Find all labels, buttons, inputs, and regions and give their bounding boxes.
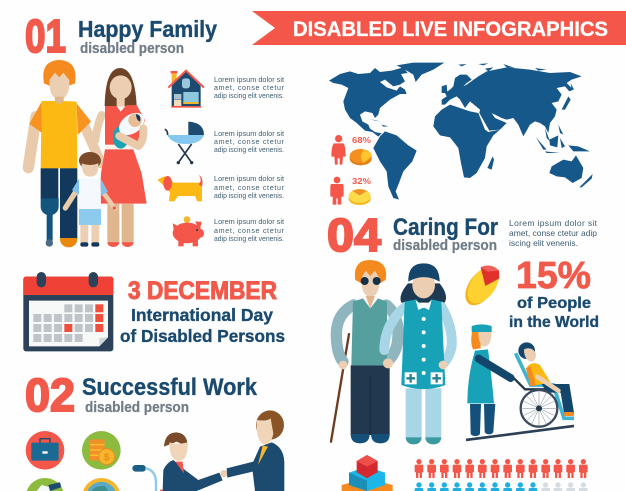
flowers	[113, 195, 125, 210]
wheelchair handle	[132, 465, 180, 491]
male figure 32%	[330, 177, 344, 205]
text block 3: amet, conse ctetur	[214, 184, 285, 192]
date heading: 3 DECEMBER	[128, 277, 277, 305]
15 percent statistic	[509, 255, 599, 331]
father	[28, 60, 101, 247]
text block 4: adip iscing elit venenis.	[214, 235, 284, 243]
section 04 heading	[327, 209, 498, 261]
nurse	[383, 263, 452, 444]
section 01 heading	[25, 10, 217, 62]
date heading: International Day	[131, 305, 273, 325]
section 01 heading: Happy Family	[78, 16, 217, 42]
boy	[65, 152, 115, 247]
cube pyramid	[342, 455, 393, 491]
15 percent statistic: 15%	[516, 255, 591, 297]
blind man	[336, 260, 398, 443]
handshake illustration	[132, 410, 284, 491]
section 04 heading: disabled person	[393, 237, 497, 254]
text block 4	[214, 218, 285, 243]
eurasia africa oceania	[433, 63, 593, 187]
text block 4: amet, conse ctetur	[214, 227, 285, 235]
section 02 heading	[25, 369, 258, 421]
text block 1: amet, conse ctetur	[214, 84, 285, 92]
americas	[329, 63, 444, 200]
section 04 heading: Caring For	[393, 214, 498, 241]
date heading	[120, 277, 285, 346]
15 percent statistic: in the World	[509, 314, 599, 331]
work icons	[26, 431, 121, 491]
left businessman	[163, 432, 228, 491]
ramp	[466, 426, 574, 440]
section 04 text: amet, conse ctetur adip	[509, 228, 597, 238]
text block 2: amet, conse ctetur	[214, 138, 285, 146]
section 02 heading: 02	[25, 369, 75, 421]
text block 1: Lorem ipsum dolor sit	[214, 76, 284, 84]
section 04 text: Lorem ipsum dolor sit	[509, 218, 598, 228]
section 01 heading: disabled person	[80, 40, 184, 57]
section 04 text: iscing elit venenis.	[509, 238, 578, 248]
date heading: of Disabled Persons	[120, 326, 285, 346]
text block 1: adip iscing elit venenis.	[214, 92, 284, 100]
female figure 68%	[331, 135, 346, 165]
banner title: DISABLED LIVE INFOGRAPHICS	[293, 17, 608, 41]
icon: handshake circle	[27, 478, 63, 491]
icon: stroller	[165, 122, 204, 164]
wheelchair scene	[466, 324, 574, 440]
text block 1	[214, 76, 285, 100]
icon: globe circle	[83, 478, 120, 491]
text block 3	[214, 175, 285, 200]
people pictogram row red	[415, 459, 588, 478]
wheelchair with patient	[514, 342, 574, 427]
text block 4: Lorem ipsum dolor sit	[214, 218, 284, 226]
caring people illustration	[331, 260, 588, 491]
icon: piggy bank	[173, 216, 204, 246]
icon: coins: $	[104, 452, 110, 463]
icon: house	[168, 71, 204, 108]
text block 3: Lorem ipsum dolor sit	[214, 175, 284, 183]
15% pie chart	[459, 260, 505, 311]
banner title	[252, 11, 626, 45]
icon: briefcase	[26, 431, 64, 470]
text block 3: adip iscing elit venenis.	[214, 192, 284, 200]
text block 2: adip iscing elit venenis.	[214, 146, 284, 154]
pie 32%	[349, 189, 371, 205]
text block 2: Lorem ipsum dolor sit	[214, 130, 284, 138]
mother with baby	[95, 68, 148, 247]
section 01 heading: 01	[25, 10, 66, 62]
icon: dog	[157, 175, 203, 201]
nurse pushing wheelchair	[467, 324, 511, 436]
gender statistics: 32%	[352, 176, 371, 186]
gender statistics	[330, 135, 372, 205]
section 02 heading: Successful Work	[82, 374, 258, 401]
right businessman	[227, 410, 284, 491]
section 04 text	[509, 218, 598, 248]
pie 68%	[350, 149, 372, 165]
family illustration	[28, 60, 148, 247]
calendar icon	[23, 272, 113, 351]
section 02 heading: disabled person	[85, 399, 189, 416]
cane	[331, 334, 349, 442]
world map	[329, 63, 593, 200]
people pictogram row blue and grey	[415, 482, 588, 491]
gender statistics: 68%	[352, 135, 371, 145]
15 percent statistic: of People	[517, 295, 591, 312]
section 04 heading: 04	[327, 209, 381, 261]
family icons and text	[157, 71, 285, 246]
text block 2	[214, 130, 285, 154]
